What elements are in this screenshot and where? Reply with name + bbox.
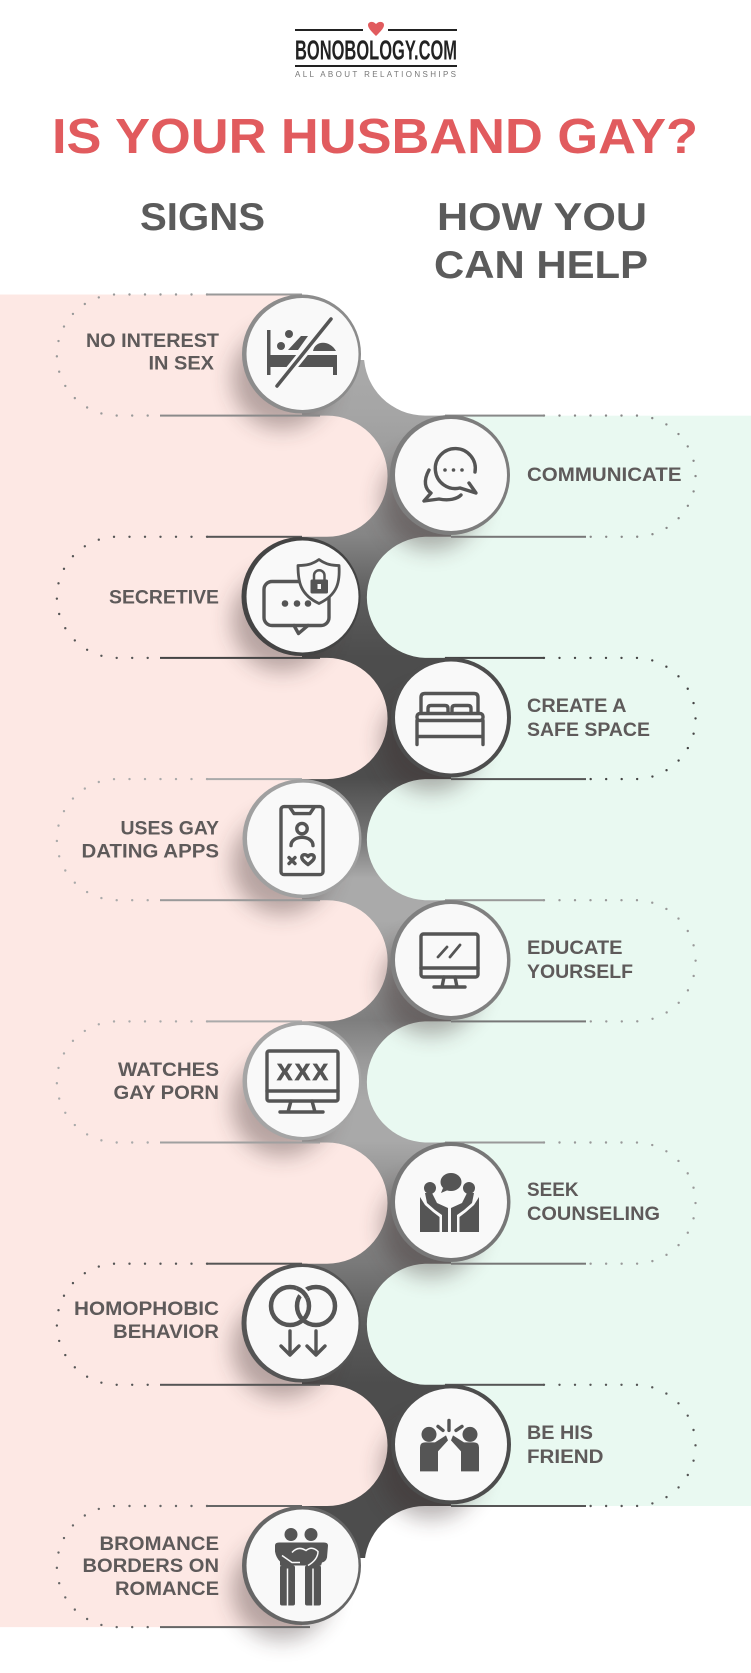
label: SEEK <box>527 1180 579 1201</box>
logo: ALL ABOUT RELATIONSHIPS <box>295 70 456 79</box>
logo <box>295 22 457 79</box>
label: CREATE A <box>527 696 627 717</box>
label <box>82 818 219 862</box>
panel: no interest in sex <box>57 294 361 417</box>
icon: chat with shield lock <box>264 560 339 634</box>
label: COUNSELING <box>527 1204 660 1225</box>
panel: bromance borders on romance <box>57 1505 361 1628</box>
icon: monitor with xxx: XXX <box>277 1059 329 1085</box>
heading: how you can help <box>434 196 648 287</box>
label: BROMANCE <box>100 1534 219 1555</box>
panel: watches gay porn <box>57 1020 361 1144</box>
icon: two men embracing <box>275 1528 328 1606</box>
icon: heart <box>368 22 384 36</box>
icon: double bed <box>417 694 483 744</box>
label: YOURSELF <box>527 962 633 983</box>
label: COMMUNICATE <box>527 465 682 486</box>
label: WATCHES <box>118 1060 219 1081</box>
label <box>82 1534 219 1600</box>
label: DATING APPS <box>82 842 219 862</box>
icon: monitor <box>421 934 478 987</box>
label: SECRETIVE <box>109 588 219 608</box>
panel: create a safe space <box>391 657 696 780</box>
icon: chat bubbles <box>424 449 476 501</box>
panel: uses gay dating apps <box>57 778 361 901</box>
label <box>527 696 650 741</box>
label <box>527 938 633 983</box>
panel: homophobic behavior <box>57 1263 360 1386</box>
heading: how you can help: CAN HELP <box>434 244 648 287</box>
white lobe: top right <box>364 290 751 416</box>
label: BEHAVIOR <box>113 1322 219 1343</box>
label: FRIEND <box>527 1447 604 1468</box>
label: HOMOPHOBIC <box>74 1299 219 1320</box>
panel: seek counseling <box>390 1142 696 1265</box>
panel: be his friend <box>391 1384 696 1507</box>
label <box>114 1060 219 1104</box>
title: IS YOUR HUSBAND GAY? <box>52 110 698 164</box>
logo: BONOBOLOGY.COM <box>295 34 457 66</box>
panel: signs background <box>0 294 388 1627</box>
label <box>86 331 219 374</box>
label: ROMANCE <box>115 1579 219 1600</box>
label: EDUCATE <box>527 938 622 959</box>
label <box>74 1299 219 1343</box>
white lobe: bottom right <box>364 1506 751 1673</box>
label: BORDERS ON <box>82 1556 219 1577</box>
icon: linked rings with down arrows <box>271 1287 335 1355</box>
circle shadows <box>232 329 481 1640</box>
label <box>527 1423 604 1468</box>
heading: how you can help: HOW YOU <box>437 196 647 239</box>
label: GAY PORN <box>114 1083 219 1104</box>
label: SAFE SPACE <box>527 720 650 741</box>
panel: educate yourself <box>390 899 696 1022</box>
heading: signs: SIGNS <box>140 196 265 239</box>
label: BE HIS <box>527 1423 593 1444</box>
label: NO INTEREST <box>86 331 219 352</box>
icon: high five <box>420 1420 479 1471</box>
label <box>527 1180 660 1225</box>
icon: monitor with xxx <box>267 1051 338 1112</box>
panel: communicate <box>390 415 696 538</box>
panel: help background <box>367 416 751 1506</box>
icon: counseling session <box>420 1173 479 1232</box>
icon: crossed-out bed <box>267 319 337 386</box>
label: USES GAY <box>120 818 219 840</box>
label: IN SEX <box>148 354 214 374</box>
panel: secretive <box>57 536 360 659</box>
icon: phone with profile <box>281 807 323 875</box>
central connector <box>302 360 451 1558</box>
